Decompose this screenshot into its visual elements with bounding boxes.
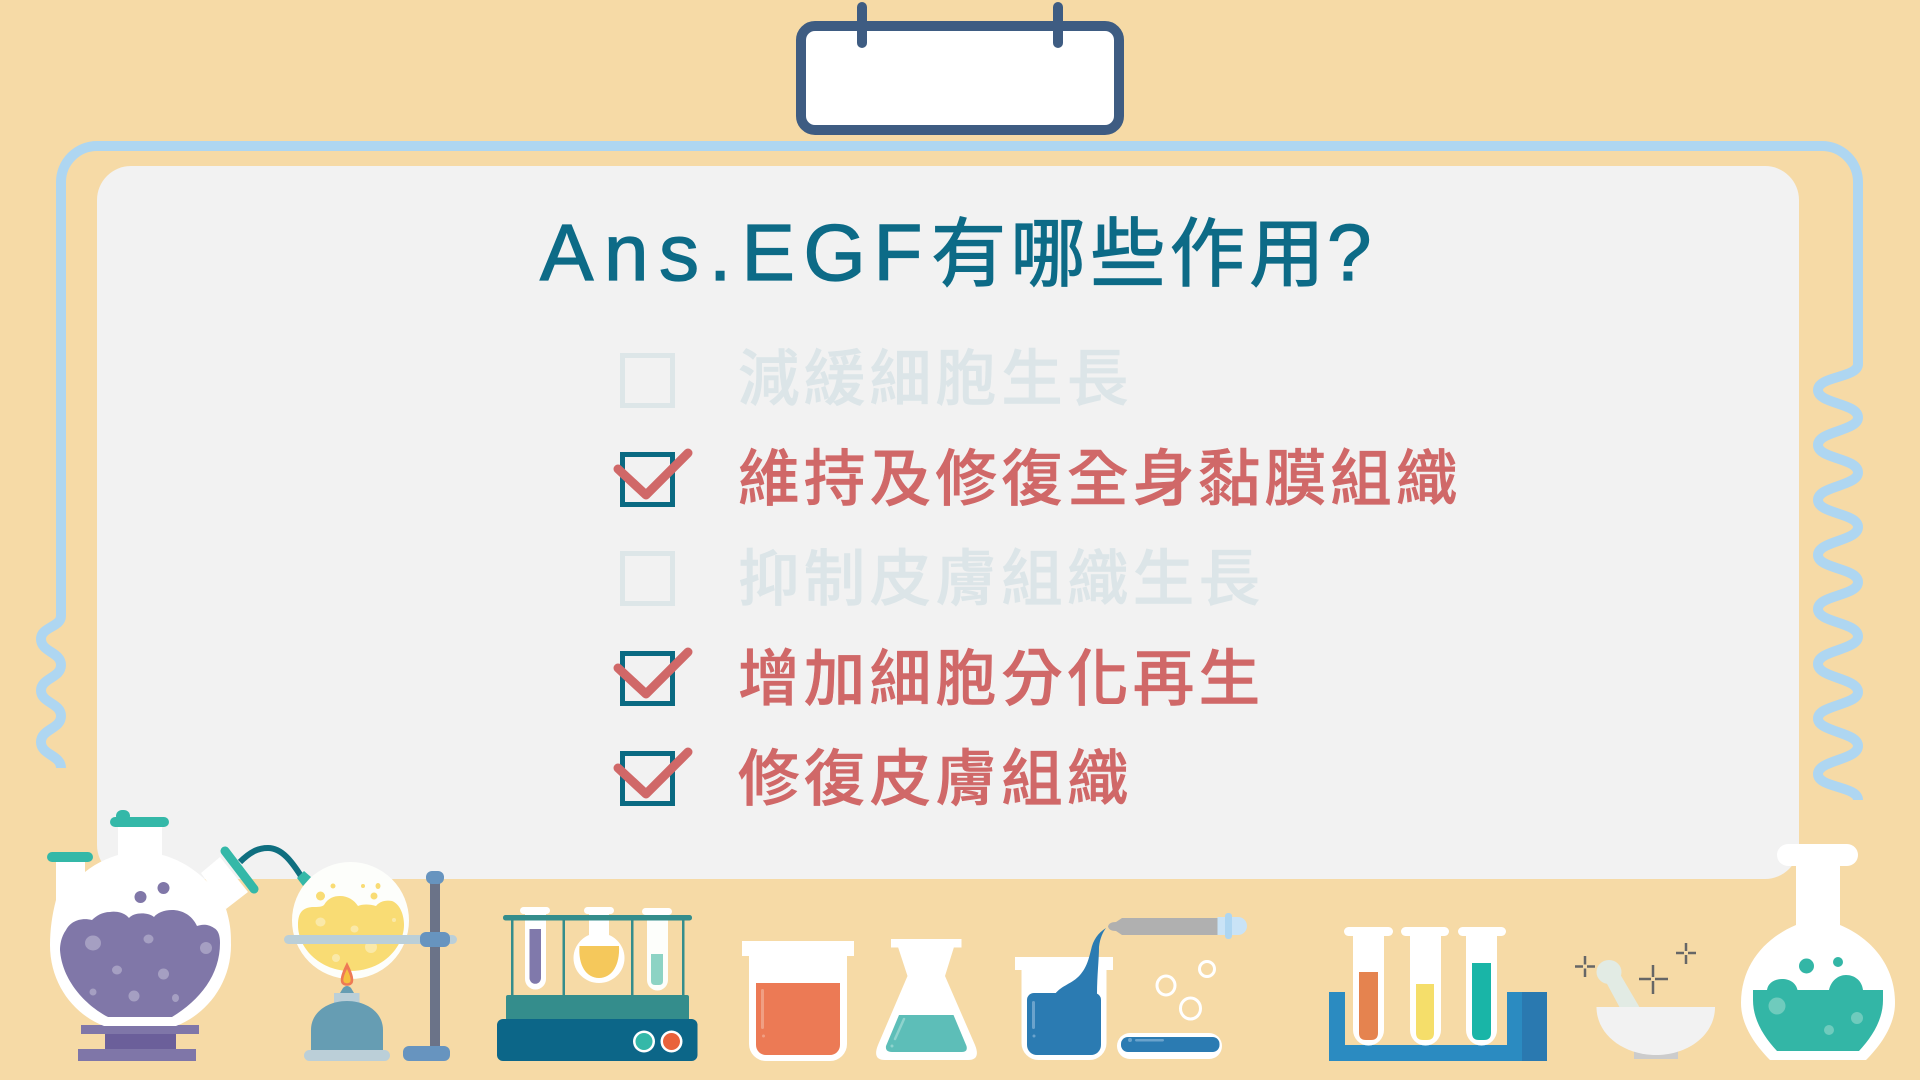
icon: test tube rack on hot plate	[497, 907, 698, 1061]
frame: light blue wavy tube	[41, 146, 1858, 800]
icon: teal erlenmeyer flask	[876, 939, 977, 1060]
title: Ans.EGF	[540, 208, 922, 297]
icon: three test tubes in blue rack	[1329, 927, 1547, 1061]
title: 有哪些作用	[931, 212, 1329, 296]
icon: dropper	[1108, 913, 1247, 939]
hanging sign board	[801, 2, 1119, 130]
icon: blue beaker with drip	[1015, 928, 1113, 1060]
list item 1: unchecked: 減緩細胞生長	[738, 345, 1133, 414]
list item 2: checked: 維持及修復全身黏膜組織	[738, 445, 1462, 514]
list item 3: unchecked: 抑制皮膚組織生長	[738, 545, 1264, 614]
icon: petri dish	[1117, 1033, 1222, 1059]
list item 4: checked: 增加細胞分化再生	[738, 645, 1264, 714]
panel: main content card	[97, 166, 1799, 879]
list item 5: checked: 修復皮膚組織	[738, 745, 1133, 814]
icon: orange beaker	[742, 941, 854, 1061]
icon: purple three-neck flask on stand	[47, 810, 254, 1061]
title: ?	[1327, 208, 1372, 297]
icon: bubbles	[1157, 962, 1214, 1019]
icon: mortar and pestle with sparkles	[1575, 943, 1715, 1059]
icon: yellow flask on burner with stand	[284, 862, 457, 1061]
icon: connecting tube	[240, 848, 301, 876]
icon: large round flask with teal liquid	[1741, 844, 1895, 1060]
